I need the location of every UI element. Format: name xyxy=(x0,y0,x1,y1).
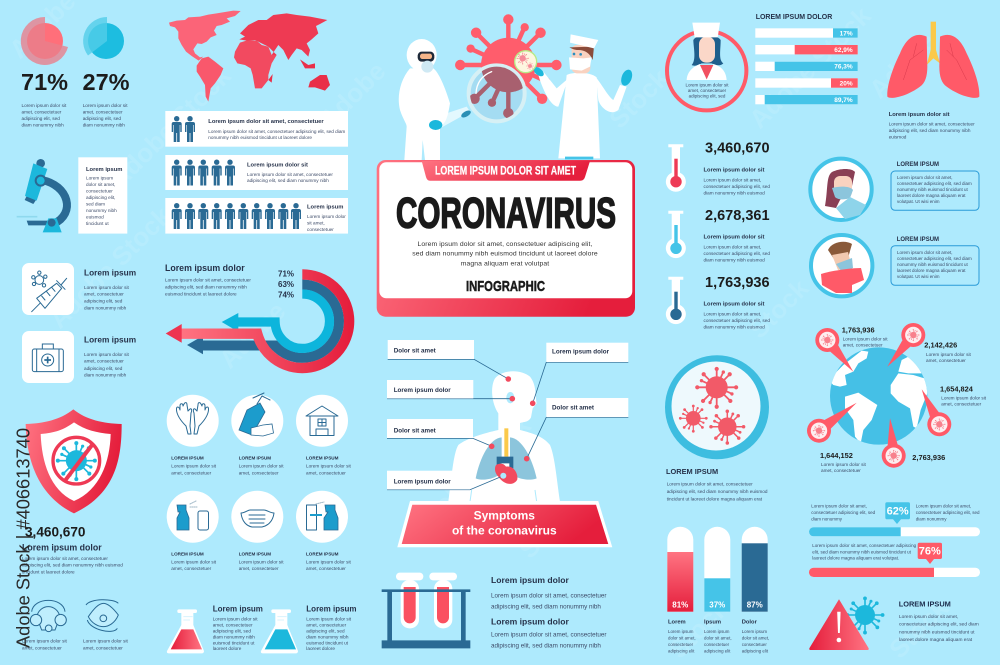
info box: consectetuer adipiscing elit, sed diam xyxy=(897,256,972,261)
lungs text: Lorem ipsum dolor sit xyxy=(889,112,950,118)
icon: lungs xyxy=(887,22,979,98)
nurse text: adipiscing elit, sed xyxy=(689,94,726,99)
infographic label: INFOGRAPHIC xyxy=(466,278,545,295)
watermark pattern: Stock xyxy=(403,233,475,304)
percent labels: 74% xyxy=(278,290,294,299)
globe xyxy=(828,347,930,445)
text: Lorem ipsum xyxy=(307,204,343,210)
text: Lorem ipsum dolor sit amet, consectetuer adipiscing elit, sed diam xyxy=(208,129,345,134)
people icons xyxy=(172,116,195,142)
blue flask text: laoreet dolore xyxy=(306,646,335,651)
text right: diam nonummy xyxy=(916,516,947,521)
watermark pattern: Stock xyxy=(743,273,815,344)
text: amet, consectetuer xyxy=(84,359,124,364)
protection labels row 2: LOREM IPSUM xyxy=(239,551,271,556)
petri text: adipiscing elit, sed diam nonummy nibh euismod xyxy=(667,489,768,494)
text: Lorem ipsum dolor sit xyxy=(84,352,130,357)
text: Lorem ipsum dolor sit amet, consectetuer xyxy=(247,172,333,177)
percent labels: 71% xyxy=(278,270,294,279)
callout: heart: Lorem ipsum dolor xyxy=(394,478,451,485)
watermark pattern: Stock xyxy=(513,493,585,564)
icon: n95 mask xyxy=(86,600,118,631)
text: diam nonummy nibh xyxy=(84,373,127,378)
text right: consectetuer adipiscing elit, sed xyxy=(916,510,980,515)
callout 62% xyxy=(885,502,910,524)
symptoms banner xyxy=(397,501,612,547)
callout: left lung xyxy=(387,419,495,449)
panel: microscope text: dolor sit amet, xyxy=(86,182,115,187)
icon: shield xyxy=(26,409,122,513)
warning heading: LOREM IPSUM xyxy=(899,600,951,609)
callout: right lung: Dolor sit amet xyxy=(552,404,595,411)
blue flask text: diam nonummy nibh xyxy=(306,634,349,639)
red flask text: Lorem ipsum dolor sit xyxy=(213,617,258,622)
callout: head: Dolor sit amet xyxy=(394,347,437,354)
text: LOREM IPSUM xyxy=(897,162,939,168)
text: adipiscing elit, sed diam nonummy nibh xyxy=(165,284,247,289)
column text 1: adipiscing elit xyxy=(668,648,695,653)
test tube text: Lorem ipsum dolor sit amet, consectetuer xyxy=(491,632,606,639)
bar 20%: 20% xyxy=(840,80,853,87)
info box: consectetuer adipiscing elit, sed diam xyxy=(897,181,972,186)
hazmat worker xyxy=(399,39,472,160)
callout: nose xyxy=(530,343,628,406)
callout: ear: Lorem ipsum dolor xyxy=(394,387,451,394)
text: adipiscing elit, sed diam nonummy nibh xyxy=(247,178,329,183)
text 71%: adipiscing elit, sed xyxy=(22,116,60,121)
stat text: adipiscing elit, sed diam nonummy nibh euismod xyxy=(22,563,123,568)
protection labels row 2: Lorem ipsum dolor sit xyxy=(171,559,217,564)
warning text: consectetuer adipiscing elit, sed diam xyxy=(899,622,979,628)
petri heading: LOREM IPSUM xyxy=(666,467,718,476)
icon: house xyxy=(296,395,348,447)
panel: progress bars xyxy=(809,502,980,577)
text: diam nonummy nibh xyxy=(84,306,127,310)
stat text: Lorem ipsum dolor sit amet, xyxy=(704,311,761,316)
nurse text: amet, consectetuer xyxy=(688,88,727,93)
label 2,142,426: amet, consectetuer xyxy=(926,358,966,363)
red arrow xyxy=(166,274,349,368)
protection labels row 1: LOREM IPSUM xyxy=(171,456,204,461)
stat 2,678,361: 2,678,361 xyxy=(705,208,770,224)
blue flask text: adipiscing elit, sed xyxy=(306,628,345,633)
panel: microscope text: nonummy nibh xyxy=(86,208,117,213)
title card inner xyxy=(379,162,632,298)
panel: column chart xyxy=(667,527,769,653)
protection labels row 2: LOREM IPSUM xyxy=(306,551,339,556)
stat text: consectetuer adipiscing elit, sed xyxy=(704,251,770,256)
icon: face mask xyxy=(231,491,283,543)
title: CORONAVIRUS xyxy=(396,190,616,238)
thermometer dark xyxy=(666,277,686,324)
panel: nurse portrait xyxy=(667,23,746,110)
column text 3: dolor sit amet, xyxy=(742,635,769,640)
stat 3,460,670: 3,460,670 xyxy=(705,141,770,157)
protection labels row 2: Lorem ipsum dolor sit xyxy=(306,559,352,564)
petri sample xyxy=(515,51,537,73)
illustration: doctors and virus xyxy=(399,14,634,160)
column text 2: adipiscing elit xyxy=(704,648,731,653)
text: Lorem ipsum dolor sit amet, consectetuer xyxy=(208,119,324,125)
panel: symptoms diagram xyxy=(387,340,628,547)
value 71%: 71% xyxy=(21,69,68,95)
panel: microscope text: consectetuer xyxy=(86,188,113,194)
red flask text: euismod tincidunt ut xyxy=(213,640,255,645)
text 27%: diam nonummy nibh xyxy=(83,123,125,128)
red flask text: adipiscing elit, sed xyxy=(213,628,251,633)
callout: right lung xyxy=(524,398,628,462)
text: euismod tincidunt ut laoreet dolore xyxy=(165,291,237,296)
stat text: tincidunt ut laoreet dolore xyxy=(22,569,75,574)
callout: left lung: Dolor sit amet xyxy=(394,427,437,434)
text 71%: amet, consectetuer xyxy=(22,110,62,114)
panel: percentage pies xyxy=(21,17,130,128)
symptoms banner: of the coronavirus xyxy=(452,524,557,538)
protection labels row 1: Lorem ipsum dolor sit xyxy=(171,464,217,469)
stat text: Lorem ipsum dolor sit amet, consectetuer xyxy=(22,556,108,561)
pin ocean xyxy=(882,418,906,468)
magnifier xyxy=(466,63,527,124)
big virus xyxy=(455,14,562,118)
panel: globe map xyxy=(807,323,987,473)
info box: laoreet dolore magna aliquam erat xyxy=(897,193,966,198)
label 1,654,824: 1,654,824 xyxy=(940,384,974,393)
petri text: Lorem ipsum dolor sit amet, consectetuer xyxy=(667,482,753,487)
watermark pattern: Stock xyxy=(603,63,675,134)
column text 3: Lorem ipsum xyxy=(742,629,767,634)
text: Lorem ipsum dolor sit xyxy=(84,285,130,290)
icon: blue flask xyxy=(261,609,298,653)
protection labels row 2: LOREM IPSUM xyxy=(171,551,204,556)
stat heading: Lorem ipsum dolor xyxy=(22,543,102,553)
nurse ring xyxy=(667,31,746,110)
stat text: Lorem ipsum dolor sit amet, xyxy=(704,244,761,249)
callout: heart xyxy=(387,471,506,490)
pin africa xyxy=(922,389,951,436)
body silhouette xyxy=(448,371,560,502)
text left: consectetuer adipiscing elit, sed xyxy=(811,510,876,515)
icon: respirator xyxy=(30,600,66,632)
icon: woman with mask xyxy=(810,159,872,220)
label 2,142,426: Lorem ipsum dolor sit xyxy=(926,352,972,357)
watermark pattern: Adobe Stock xyxy=(403,410,537,544)
percent labels: 63% xyxy=(278,280,294,289)
panel: people row 2 xyxy=(165,111,348,147)
column text 3: consectetuer xyxy=(742,642,767,647)
red flask text: amet, consectetuer xyxy=(213,623,253,628)
column text 1: Lorem xyxy=(668,619,686,625)
watermark pattern: Adobe xyxy=(313,56,391,134)
panel: arrow ring chart xyxy=(165,263,349,368)
watermark pattern: Adobe xyxy=(213,296,291,374)
icon: syringe xyxy=(32,271,67,312)
pin south america xyxy=(807,403,857,443)
red flask text: laoreet dolore xyxy=(213,646,242,651)
icon: petri dish xyxy=(665,355,769,459)
text: laoreet dolore magna aliquam erat volutpat. xyxy=(812,556,899,561)
text: sit amet, xyxy=(307,220,325,226)
panel: microscope text: tincidunt ut xyxy=(86,221,109,226)
panel: people row 10 xyxy=(165,198,348,234)
protection labels row 2: Lorem ipsum dolor sit xyxy=(239,559,284,564)
bar 89,7%: 89,7% xyxy=(834,97,853,104)
icon: man coughing xyxy=(811,235,872,296)
heading: Lorem ipsum dolor xyxy=(165,263,245,273)
panel: thermometer stats xyxy=(666,141,770,330)
text: Lorem ipsum dolor sit xyxy=(247,162,308,168)
subtitle text: magna aliquam erat volutpat xyxy=(461,260,549,267)
protection labels row 1: Lorem ipsum dolor sit xyxy=(239,464,284,469)
blue flask text: Lorem ipsum dolor sit xyxy=(306,617,352,622)
thermometer cyan xyxy=(666,211,686,258)
icon: microscope xyxy=(17,159,67,232)
panel: microscope text: Lorem ipsum xyxy=(86,176,113,180)
text: Lorem ipsum dolor xyxy=(307,214,346,219)
label 1,644,152: 1,644,152 xyxy=(820,451,853,460)
text 27%: Lorem ipsum dolor sit xyxy=(83,103,128,108)
text: adipiscing elit, sed xyxy=(84,366,123,371)
panel: title card xyxy=(377,160,635,317)
label 1,654,824: Lorem ipsum dolor sit xyxy=(941,395,987,400)
column text 1: consectetuer xyxy=(668,642,694,647)
text 27%: amet, consectetuer xyxy=(83,110,123,114)
test tube text: Lorem ipsum dolor sit amet, consectetuer xyxy=(491,593,606,600)
protection labels row 2: amet, consectetuer xyxy=(306,566,346,571)
watermark pattern: Stock xyxy=(883,593,955,664)
icon: red flask xyxy=(167,609,204,653)
protection labels row 1: Lorem ipsum dolor sit xyxy=(306,464,352,469)
stat text: consectetuer adipiscing elit, sed xyxy=(704,318,770,323)
subtitle text: Lorem ipsum dolor sit amet, consectetuer adipiscing elit, xyxy=(418,241,592,248)
bar 17%: 17% xyxy=(840,30,853,37)
value 27%: 27% xyxy=(82,69,130,95)
panel: protection icons xyxy=(167,393,348,543)
stat text: diam nonummy nibh euismod xyxy=(704,258,765,263)
text: consectetuer xyxy=(307,227,334,232)
panel: people row 5 xyxy=(165,155,348,190)
text 71%: Lorem ipsum dolor sit xyxy=(22,103,67,108)
petri text: tincidunt ut laoreet dolore magna aliquam erat xyxy=(667,496,763,502)
stat text: diam nonummy nibh euismod xyxy=(704,191,765,196)
respirator text: amet, consectetuer xyxy=(22,646,62,650)
panel: microscope text: adipiscing elit, xyxy=(86,195,115,200)
column 37%: 37% xyxy=(709,600,725,609)
text 27%: adipiscing elit, sed xyxy=(83,116,121,121)
test tube text: Lorem ipsum dolor xyxy=(491,617,569,627)
info box xyxy=(891,246,979,285)
column text 2: dolor sit amet, xyxy=(704,635,732,640)
pin asia xyxy=(887,323,925,367)
text right: Lorem ipsum dolor sit amet, xyxy=(916,503,971,508)
warning text: nonummy nibh euismod tincidunt ut xyxy=(899,629,975,635)
warning text: Lorem ipsum dolor sit amet, xyxy=(899,614,958,620)
protection labels row 1: amet, consectetuer xyxy=(239,470,279,475)
callout 76% xyxy=(918,543,942,564)
label 2,763,936: 2,763,936 xyxy=(912,453,945,462)
people icons xyxy=(172,203,301,229)
nurse text: Lorem ipsum dolor sit xyxy=(685,82,729,88)
info box: nonummy nibh euismod tincidunt ut xyxy=(897,187,969,192)
subtitle text: sed diam nonummy nibh euismod tincidunt ut laoreet dolore xyxy=(412,251,598,258)
thermometer red xyxy=(666,144,686,192)
dark arrow xyxy=(187,284,339,358)
callout: nose: Lorem ipsum dolor xyxy=(552,348,610,355)
blue flask text: amet, consectetuer xyxy=(306,623,347,628)
text: LOREM IPSUM xyxy=(897,237,939,243)
stat text: Lorem ipsum dolor sit xyxy=(704,301,764,307)
test tube text: Lorem ipsum dolor xyxy=(491,575,569,585)
respirator text: Lorem ipsum dolor sit xyxy=(22,639,68,644)
info box: Lorem ipsum dolor sit amet, xyxy=(897,250,953,255)
protection labels row 1 xyxy=(171,456,352,475)
label 1,654,824: amet, consectetuer xyxy=(941,401,982,406)
panel: vaccine tile xyxy=(22,263,136,315)
pin north america xyxy=(815,328,853,372)
label 1,644,152: Lorem ipsum dolor sit xyxy=(821,462,867,467)
symptoms banner: Symptoms xyxy=(474,508,535,522)
people icons xyxy=(172,160,235,186)
panel: microscope text xyxy=(78,157,127,234)
watermark pattern: Adobe Stock xyxy=(43,200,177,334)
cyan arrow xyxy=(222,294,329,348)
label 1,644,152: amet, consectetuer xyxy=(821,468,861,473)
stat text: Lorem ipsum dolor sit xyxy=(704,234,764,240)
column 87%: 87% xyxy=(747,600,763,609)
column 81%: 81% xyxy=(672,600,688,609)
text: nonummy nibh euismod tincidunt ut laoreet dolore xyxy=(208,135,312,140)
progress bar 76% xyxy=(809,568,980,577)
text left: Lorem ipsum dolor sit amet, xyxy=(811,503,867,508)
mask text: Lorem ipsum dolor sit xyxy=(83,639,129,644)
label 1,763,936: Lorem ipsum dolor sit xyxy=(843,336,888,341)
text 71%: diam nonummy nibh xyxy=(22,123,64,128)
icon: nurse xyxy=(687,23,727,80)
protection labels row 1: amet, consectetuer xyxy=(171,470,212,475)
progress bar 62% xyxy=(809,527,980,536)
label 1,763,936: 1,763,936 xyxy=(842,326,875,335)
icon: warning and virus xyxy=(809,596,884,650)
protection labels row 2 xyxy=(171,551,352,571)
text: adipiscing elit, sed xyxy=(84,298,123,304)
watermark pattern: Adobe xyxy=(863,26,941,104)
stock watermark id: Adobe Stock | #406613740 xyxy=(13,428,33,648)
info box: volutpat. Ut wisi enim xyxy=(897,274,940,279)
text: amet, consectetuer xyxy=(84,292,124,297)
icon: first aid kit xyxy=(32,344,63,372)
column text 2: Ipsum xyxy=(704,619,721,625)
red flask text: Lorem ipsum xyxy=(213,604,263,613)
label 1,763,936: amet, consectetuer xyxy=(843,342,883,348)
panel: microscope text: euismod xyxy=(86,214,104,220)
protection labels row 1: LOREM IPSUM xyxy=(239,456,271,461)
column text 3: adipiscing elit xyxy=(742,648,769,653)
icon: surface spray xyxy=(167,491,219,543)
column text 2: consectetuer xyxy=(704,642,730,647)
warning text: laoreet dolore magna aliquam erat xyxy=(899,637,973,643)
watermark pattern: Adobe Stock xyxy=(743,0,877,134)
panel: microscope text: sed diam xyxy=(86,202,105,206)
watermark pattern: Adobe Stock xyxy=(103,60,237,194)
icon: hand sanitizer xyxy=(231,393,283,447)
text: elit, sed diam nonummy nibh euismod tincidunt ut xyxy=(812,549,912,554)
doctor xyxy=(532,34,634,159)
text: Lorem ipsum xyxy=(84,268,136,278)
stat 3,460,670: 3,460,670 xyxy=(25,525,85,540)
stat 1,763,936: 1,763,936 xyxy=(705,275,770,291)
column text 2: Lorem ipsum xyxy=(704,629,730,634)
bar 76,3%: 76,3% xyxy=(834,64,853,71)
icon: door spray xyxy=(296,491,348,543)
text: Lorem ipsum dolor sit amet, consectetuer adipiscing xyxy=(812,543,917,548)
callout: ear xyxy=(387,380,515,402)
protection labels row 1: amet, consectetuer xyxy=(306,470,346,475)
lungs text: adipiscing elit, sed diam nonummy nibh xyxy=(889,128,971,133)
column text 1: Lorem ipsum xyxy=(668,629,694,634)
panel: microscope text: Lorem ipsum xyxy=(86,167,122,173)
panel: horizontal bars xyxy=(755,14,858,104)
info box xyxy=(891,171,979,210)
lungs text: Lorem ipsum dolor sit amet, consectetuer xyxy=(889,121,975,126)
stat text: Lorem ipsum dolor sit xyxy=(704,167,764,173)
callout: head xyxy=(388,340,511,382)
bar 62,9%: 62,9% xyxy=(834,47,853,54)
blue flask text: Lorem ipsum xyxy=(306,604,357,613)
test tube text: adipiscing elit, sed diam nonummy nibh xyxy=(491,603,601,610)
ribbon: LOREM IPSUM DOLOR SIT AMET xyxy=(435,165,576,177)
blue flask text: euismod tincidunt ut xyxy=(306,640,349,645)
pie chart 71% xyxy=(21,17,68,65)
icon: test tubes xyxy=(382,573,470,648)
icon: gloves xyxy=(167,395,219,447)
text left: diam nonummy xyxy=(811,516,843,521)
info box: Lorem ipsum dolor sit amet, xyxy=(897,175,953,180)
pie chart 27% xyxy=(83,17,124,59)
info box: volutpat. Ut wisi enim xyxy=(897,199,940,204)
stat text: diam nonummy nibh euismod xyxy=(704,325,765,330)
label 2,142,426: 2,142,426 xyxy=(924,341,957,350)
red flask text: diam nonummy nibh xyxy=(213,634,255,639)
protection labels row 2: amet, consectetuer xyxy=(239,566,279,571)
info box: nonummy nibh euismod tincidunt ut xyxy=(897,262,969,267)
heading: LOREM IPSUM DOLOR xyxy=(756,14,832,21)
protection labels row 1: LOREM IPSUM xyxy=(306,456,339,461)
watermark pattern: Stock xyxy=(663,593,735,664)
ribbon xyxy=(422,161,590,181)
column text 1: dolor sit amet, xyxy=(668,635,696,640)
test tube text: adipiscing elit, sed diam nonummy nibh xyxy=(491,643,601,650)
world map xyxy=(169,11,330,102)
info box: laoreet dolore magna aliquam erat xyxy=(897,268,966,273)
lungs text: euismod xyxy=(889,134,907,139)
mask text: amet, consectetuer xyxy=(83,646,123,650)
panel: first aid tile xyxy=(22,331,136,383)
callout 76%: 76% xyxy=(919,546,941,558)
stat text: Lorem ipsum dolor sit amet, xyxy=(704,177,761,182)
column text 3: Dolor xyxy=(742,619,758,625)
text: Lorem ipsum xyxy=(84,335,136,345)
callout 62%: 62% xyxy=(887,506,909,518)
stat text: consectetuer adipiscing elit, sed xyxy=(704,184,770,189)
text: Lorem ipsum dolor sit amet, consectetuer xyxy=(165,278,251,283)
protection labels row 2: amet, consectetuer xyxy=(171,566,212,571)
